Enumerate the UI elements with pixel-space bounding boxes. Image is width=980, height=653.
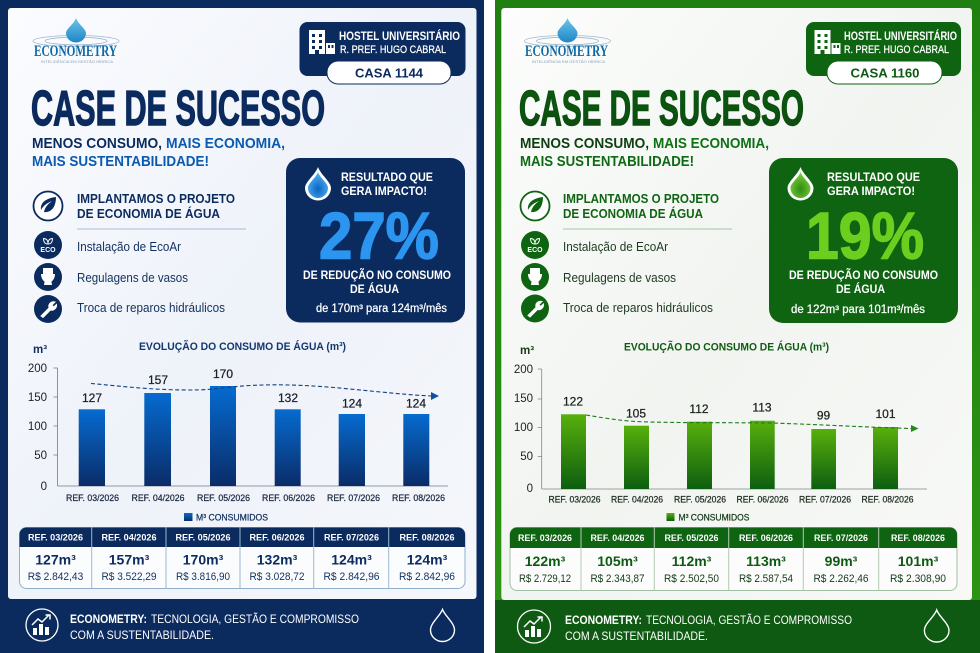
bar chart: green: REF. 04/2026 xyxy=(611,495,663,506)
table: green monthly values: 101m³ xyxy=(898,553,939,569)
table: blue monthly values: REF. 07/2026 xyxy=(324,533,379,544)
table: green monthly values: R$ 2.587,54 xyxy=(739,573,793,585)
address badge: R. PREF. HUGO CABRAL xyxy=(340,44,446,56)
address badge: HOSTEL UNIVERSITÁRIO xyxy=(844,30,957,43)
bar chart: green: 150 xyxy=(514,393,533,405)
bar chart: green: REF. 03/2026 xyxy=(548,495,600,506)
text: reparos: Troca de reparos hidráulicos xyxy=(77,301,225,315)
result heading xyxy=(341,170,433,198)
footer: blue: COM A SUSTENTABILIDADE. xyxy=(70,630,214,642)
text: EcoAr: Instalação de EcoAr xyxy=(77,240,181,254)
address badge: R. PREF. HUGO CABRAL xyxy=(844,44,949,56)
table: green monthly values: 112m³ xyxy=(672,553,712,569)
result description xyxy=(789,269,938,316)
table: green monthly values: REF. 05/2026 xyxy=(664,533,718,544)
bar chart: blue xyxy=(28,340,448,524)
icon: eco xyxy=(34,231,62,259)
table: green monthly values: 99m³ xyxy=(825,553,858,569)
icon: leaf xyxy=(520,192,550,220)
table: green monthly values: 122m³ xyxy=(525,553,566,569)
legend: M³ CONSUMIDOS xyxy=(678,512,750,524)
project heading xyxy=(77,191,235,221)
bar chart: blue: 150 xyxy=(28,392,47,404)
icon: growth chart xyxy=(26,609,58,641)
bar chart: green: 50 xyxy=(520,451,533,463)
table: green monthly values: 105m³ xyxy=(597,553,638,569)
bar chart: blue: REF. 05/2026 xyxy=(197,493,250,504)
bar chart: green: 112 xyxy=(689,402,709,416)
table: green monthly values: R$ 2.502,50 xyxy=(664,573,719,585)
result heading: RESULTADO QUE xyxy=(341,170,433,184)
icon: eco: ECO xyxy=(527,247,543,254)
bar chart: green: EVOLUÇÃO DO CONSUMO DE ÁGUA (m³) xyxy=(624,340,829,354)
bar chart: green: REF. 07/2026 xyxy=(799,495,851,506)
icon: outline drop xyxy=(924,610,949,642)
text: vasos: Regulagens de vasos xyxy=(77,271,188,285)
table: green monthly values: R$ 2.343,87 xyxy=(590,573,644,585)
table: blue monthly values: R$ 3.522,29 xyxy=(102,571,156,583)
table: blue monthly values: REF. 08/2026 xyxy=(400,533,454,544)
table: blue monthly values: REF. 05/2026 xyxy=(176,533,230,544)
bar chart: blue: 200 xyxy=(28,363,47,375)
text: reparos: Troca de reparos hidráulicos xyxy=(563,301,713,315)
project heading: DE ECONOMIA DE ÁGUA xyxy=(563,206,704,221)
subtitle: MAIS SUSTENTABILIDADE! xyxy=(32,153,209,170)
bar chart: green: 105 xyxy=(626,407,646,421)
table: green monthly values: REF. 07/2026 xyxy=(814,533,868,544)
bar chart: blue: 127 xyxy=(82,391,102,405)
result description: de 170m³ para 124m³/mês xyxy=(316,303,447,315)
logo: Econometry: ECONOMETRY xyxy=(34,43,117,60)
footer: green xyxy=(518,610,949,643)
bar chart: green: 113 xyxy=(752,401,772,415)
panel: project actions xyxy=(520,191,732,322)
bar chart: green: m³ xyxy=(520,345,534,357)
big number: 19% xyxy=(806,198,924,272)
table: blue monthly values: R$ 2.842,43 xyxy=(28,571,83,583)
result heading: RESULTADO QUE xyxy=(827,170,920,184)
bar chart: green: 99 xyxy=(817,409,830,423)
icon: building xyxy=(814,30,840,54)
table: green monthly values: REF. 08/2026 xyxy=(891,533,945,544)
bar chart: blue: EVOLUÇÃO DO CONSUMO DE ÁGUA (m³) xyxy=(139,340,346,353)
title: CASE DE SUCESSO xyxy=(519,82,804,136)
logo: Econometry xyxy=(524,18,610,64)
result description xyxy=(303,269,451,315)
icon: eco xyxy=(521,231,549,259)
bar chart: green: REF. 08/2026 xyxy=(862,495,914,506)
table: green monthly values: REF. 04/2026 xyxy=(590,533,644,544)
table: green monthly values: R$ 2.308,90 xyxy=(890,573,946,585)
table: blue monthly values: REF. 04/2026 xyxy=(102,533,156,544)
icon: result drop xyxy=(305,167,331,201)
address badge: HOSTEL UNIVERSITÁRIO xyxy=(339,30,460,43)
bar chart: blue: 0 xyxy=(41,481,47,493)
address badge xyxy=(300,22,466,84)
result description: DE REDUÇÃO NO CONSUMO xyxy=(789,269,938,282)
bar chart: blue: REF. 06/2026 xyxy=(262,493,315,504)
bar chart: blue: REF. 04/2026 xyxy=(132,493,184,504)
legend: M³ CONSUMIDOS xyxy=(196,512,268,524)
logo: Econometry: INTELIGÊNCIA EM GESTÃO HÍDRICA xyxy=(532,59,605,64)
address badge: CASA 1144 xyxy=(355,66,424,80)
table: blue monthly values: REF. 03/2026 xyxy=(28,533,83,544)
table: blue monthly values: R$ 3.028,72 xyxy=(250,571,304,583)
text: EcoAr: Instalação de EcoAr xyxy=(563,240,668,254)
table: blue monthly values: REF. 06/2026 xyxy=(250,533,304,544)
footer: blue: ECONOMETRY: xyxy=(70,614,147,626)
bar chart: green: 100 xyxy=(514,422,533,434)
subtitle: MENOS CONSUMO, xyxy=(520,135,649,152)
project heading: DE ECONOMIA DE ÁGUA xyxy=(77,206,221,221)
bar chart: blue: 124 xyxy=(342,396,362,410)
logo: Econometry: ECONOMETRY xyxy=(525,43,608,60)
table: blue monthly values xyxy=(20,528,465,588)
bar chart: blue: 157 xyxy=(148,373,168,387)
bar chart: green xyxy=(514,340,927,524)
result description: DE REDUÇÃO NO CONSUMO xyxy=(303,269,451,282)
result heading: GERA IMPACTO! xyxy=(341,184,427,198)
bar chart: blue: 132 xyxy=(278,391,298,405)
project heading: IMPLANTAMOS O PROJETO xyxy=(77,191,235,206)
bar chart: blue: REF. 03/2026 xyxy=(66,493,119,504)
logo: Econometry xyxy=(33,18,119,64)
bar chart: blue: 100 xyxy=(28,421,47,433)
address badge xyxy=(806,22,961,84)
table: green monthly values: R$ 2.262,46 xyxy=(814,573,868,585)
bar chart: green: 101 xyxy=(875,407,896,421)
table: green monthly values: REF. 03/2026 xyxy=(518,533,572,544)
table: blue monthly values: R$ 2.842,96 xyxy=(399,571,455,583)
table: green monthly values: REF. 06/2026 xyxy=(739,533,793,544)
subtitle: MENOS CONSUMO, xyxy=(32,135,162,152)
bar chart: blue: 124 xyxy=(406,396,426,410)
icon: toilet xyxy=(521,263,549,291)
icon: building xyxy=(309,30,335,54)
icon: toilet xyxy=(34,263,62,291)
subtitle: MAIS ECONOMIA, xyxy=(653,135,769,152)
table: blue monthly values: 124m³ xyxy=(407,552,448,568)
footer: green: TECNOLOGIA, GESTÃO E COMPROMISSO xyxy=(646,614,852,627)
footer: blue: TECNOLOGIA, GESTÃO E COMPROMISSO xyxy=(151,613,359,626)
subtitle xyxy=(520,135,769,170)
panel: project actions xyxy=(34,191,246,323)
table: blue monthly values: 132m³ xyxy=(257,552,298,568)
big number: 27% xyxy=(319,198,439,272)
icon: growth chart xyxy=(518,610,550,643)
logo: Econometry: INTELIGÊNCIA EM GESTÃO HÍDRICA xyxy=(41,59,113,64)
result description: DE ÁGUA xyxy=(350,283,399,296)
table: blue monthly values: R$ 3.816,90 xyxy=(176,571,230,583)
bar chart: blue: 50 xyxy=(34,450,47,462)
icon: eco: ECO xyxy=(40,247,56,254)
icon: result drop xyxy=(788,167,814,201)
project heading: IMPLANTAMOS O PROJETO xyxy=(563,191,719,206)
bar chart: green: 122 xyxy=(563,395,583,409)
table: blue monthly values: 157m³ xyxy=(109,552,150,568)
footer: green: ECONOMETRY: xyxy=(565,615,642,627)
bar chart: blue: 170 xyxy=(213,367,233,381)
bar chart: green: REF. 06/2026 xyxy=(736,495,788,506)
bar chart: green: 200 xyxy=(514,364,533,376)
bar chart: green: 0 xyxy=(527,483,533,495)
footer: green: COM A SUSTENTABILIDADE. xyxy=(565,631,708,643)
icon: wrench xyxy=(34,295,62,323)
icon: wrench xyxy=(521,294,549,322)
subtitle xyxy=(32,135,285,170)
panel: green case 1160 xyxy=(495,0,980,653)
result heading xyxy=(827,170,920,198)
title: CASE DE SUCESSO xyxy=(31,82,325,136)
table: green monthly values: R$ 2.729,12 xyxy=(519,573,571,585)
panel: result 19% xyxy=(769,158,958,323)
table: blue monthly values: 124m³ xyxy=(331,552,372,568)
address badge: CASA 1160 xyxy=(850,66,920,80)
panel: result 27% xyxy=(286,158,465,322)
icon: leaf xyxy=(34,192,62,220)
icon: outline drop xyxy=(430,610,454,642)
text: vasos: Regulagens de vasos xyxy=(563,271,676,285)
table: blue monthly values: R$ 2.842,96 xyxy=(324,571,380,583)
subtitle: MAIS ECONOMIA, xyxy=(166,135,285,152)
table: blue monthly values: 127m³ xyxy=(35,552,76,568)
result description: de 122m³ para 101m³/mês xyxy=(791,304,925,316)
project heading xyxy=(563,191,719,221)
bar chart: blue: REF. 07/2026 xyxy=(327,493,380,504)
panel: blue case 1144 xyxy=(0,0,484,653)
table: blue monthly values: 170m³ xyxy=(183,552,224,568)
footer: blue xyxy=(26,609,454,642)
bar chart: green: REF. 05/2026 xyxy=(674,495,726,506)
subtitle: MAIS SUSTENTABILIDADE! xyxy=(520,153,694,170)
result heading: GERA IMPACTO! xyxy=(827,184,915,198)
result description: DE ÁGUA xyxy=(836,283,885,296)
table: green monthly values: 113m³ xyxy=(746,553,786,569)
table: green monthly values xyxy=(510,528,957,590)
bar chart: blue: REF. 08/2026 xyxy=(392,493,445,504)
bar chart: blue: m³ xyxy=(33,344,47,356)
